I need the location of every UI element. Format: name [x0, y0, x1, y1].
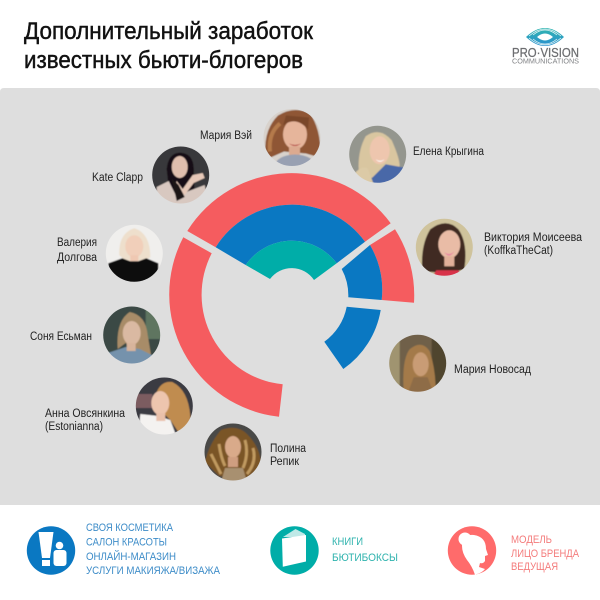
label: Анна Овсянкина: Анна Овсянкина [45, 408, 126, 420]
photo: Соня Есьман [102, 305, 162, 365]
label: Валерия Долгова: Долгова [57, 252, 98, 264]
title: известных бьюти-блогеров [24, 47, 303, 74]
logo: Pro-Vision Communications: COMMUNICATIONS [512, 58, 579, 66]
legend text: cosmetics [86, 522, 221, 577]
legend text: cosmetics: УСЛУГИ МАКИЯЖА/ВИЗАЖА [86, 565, 221, 577]
segment: top sector, books [246, 241, 337, 280]
photo: Мария Новосад [388, 333, 448, 393]
photo: Мария Вэй [264, 109, 320, 166]
segment: left sector, model [169, 237, 283, 417]
label: Соня Есьман: Соня Есьман [30, 331, 92, 343]
title [24, 18, 313, 74]
photo: Kate Clapp [151, 145, 211, 205]
photo: Елена Крыгина [348, 124, 408, 184]
legend text: books [332, 536, 398, 564]
legend text: cosmetics: ОНЛАЙН-МАГАЗИН [86, 550, 176, 563]
label: Мария Новосад: Мария Новосад [454, 364, 531, 376]
label: Анна Овсянкина: (Estonianna) [45, 421, 103, 433]
label: Виктория Моисеева [484, 232, 583, 257]
title: Дополнительный заработок [24, 18, 313, 45]
legend text: model: МОДЕЛЬ [511, 534, 552, 546]
photo: Валерия Долгова [104, 223, 164, 283]
label: Мария Вэй: Мария Вэй [200, 130, 252, 142]
segment: right sector, cosmetics [342, 245, 382, 300]
logo: Pro-Vision Communications: PRO·VISION [512, 46, 579, 60]
grey chart panel [0, 88, 600, 505]
segment: lower right, cosmetics [324, 307, 381, 369]
segment: top sector, cosmetics [216, 205, 365, 265]
segment: top sector, model [187, 173, 391, 247]
legend text: cosmetics: САЛОН КРАСОТЫ [86, 536, 167, 548]
photo: Анна Овсянкина [134, 376, 194, 436]
photo: Виктория Моисеева [414, 217, 474, 277]
legend icon: books [270, 526, 319, 575]
photo: Полина Репик [203, 422, 263, 482]
legend text: model [511, 534, 580, 573]
label: Полина Репик: Полина [270, 443, 307, 455]
label: Полина Репик: Репик [270, 456, 300, 468]
label: Елена Крыгина: Елена Крыгина [413, 146, 485, 158]
logo: Pro-Vision Communications [512, 28, 579, 66]
radial chart [169, 173, 414, 417]
label: Kate Clapp: Kate Clapp [92, 172, 143, 184]
legend text: books: БЮТИБОКСЫ [332, 552, 398, 564]
legend text: books: КНИГИ [332, 536, 363, 548]
legend text: model: ВЕДУЩАЯ [511, 561, 558, 573]
label: Полина Репик [270, 443, 307, 468]
label: Анна Овсянкина [45, 408, 126, 433]
label: Виктория Моисеева: Виктория Моисеева [484, 232, 583, 244]
label: Валерия Долгова: Валерия [57, 237, 97, 249]
legend text: cosmetics: СВОЯ КОСМЕТИКА [86, 522, 174, 534]
legend icon: cosmetics [27, 526, 75, 575]
legend icon: model silhouette [448, 526, 496, 575]
legend text: model: ЛИЦО БРЕНДА [511, 548, 580, 560]
label: Виктория Моисеева: (KoffkaTheCat) [484, 245, 553, 257]
label: Валерия Долгова [57, 237, 98, 264]
segment: right sector, model [370, 229, 414, 303]
